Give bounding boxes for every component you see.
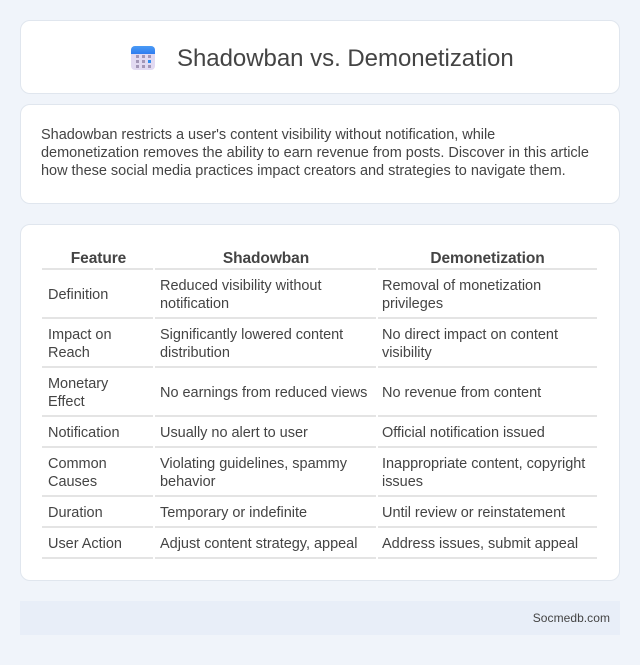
panel: introduction [20,104,620,204]
row: User Action [48,536,578,552]
row: Notification: Usually no alert to user [160,425,308,441]
row: User Action: Address issues, submit appeal [382,536,578,552]
table header: Shadowban [223,250,309,267]
row: Definition: Removal of monetization [382,278,541,294]
row: Monetary Effect: Monetary [48,376,108,392]
intro text: demonetization removes the ability to earn revenue from posts. Discover in this article [41,145,589,161]
intro text: Shadowban restricts a user's content visibility without notification, while [41,127,495,143]
row: Monetary Effect [48,376,542,410]
panel: comparison table [20,224,620,581]
row: Monetary Effect: No earnings from reduced views [160,385,367,401]
row: Impact on Reach: Significantly lowered content [160,327,343,343]
row: Common Causes: issues [382,474,423,490]
title: Shadowban vs. Demonetization [177,45,514,72]
row: Common Causes: behavior [160,474,215,490]
row: Duration: Until review or reinstatement [382,505,565,521]
row: Common Causes: Inappropriate content, copyright [382,456,585,472]
table header: Demonetization [430,250,545,267]
row: Impact on Reach: visibility [382,345,432,361]
row: Notification [48,425,545,441]
row: Monetary Effect: Effect [48,394,85,410]
row: Definition: Reduced visibility without [160,278,321,294]
row: Definition: notification [160,296,229,312]
row: Monetary Effect: No revenue from content [382,385,541,401]
row: Common Causes: Violating guidelines, spammy [160,456,347,472]
footer text: Socmedb.com [533,611,610,625]
row: Notification: Official notification issued [382,425,545,441]
row: Definition: Definition [48,287,108,303]
row: Duration: Duration [48,505,103,521]
row: Definition: privileges [382,296,443,312]
row: Common Causes [48,456,586,490]
row: User Action: Adjust content strategy, appeal [160,536,357,552]
row: Notification: Notification [48,425,120,441]
row: Impact on Reach: Reach [48,345,90,361]
row: Duration: Temporary or indefinite [160,505,307,521]
icon: calendar [131,46,155,70]
intro text [41,127,589,179]
row: Common Causes: Common [48,456,107,472]
table header: Feature [71,250,126,267]
row: Impact on Reach: distribution [160,345,230,361]
panel: title card [20,20,620,94]
table header [71,250,545,267]
row: Impact on Reach: Impact on [48,327,112,343]
row: Definition [48,278,541,312]
footer bar [20,601,620,635]
row: Duration [48,505,566,521]
comparison table [42,250,597,559]
row: Impact on Reach: No direct impact on content [382,327,558,343]
row: Impact on Reach [48,327,558,361]
intro text: how these social media practices impact creators and strategies to navigate them. [41,163,566,179]
row: User Action: User Action [48,536,122,552]
row: Common Causes: Causes [48,474,97,490]
